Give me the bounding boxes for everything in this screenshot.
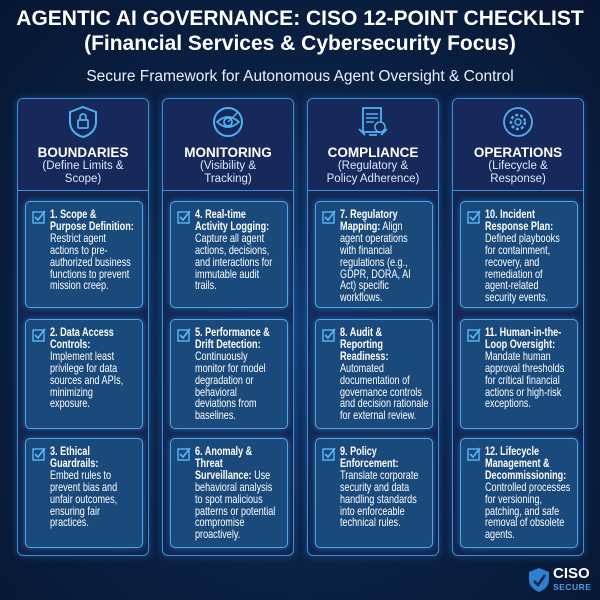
card 12: removal of obsolete xyxy=(485,515,564,529)
card 9: technical rules. xyxy=(340,515,401,529)
card 5: deviations from xyxy=(195,396,257,410)
card 8: Readiness: xyxy=(340,349,388,363)
card 12: agents. xyxy=(485,527,515,541)
header: operations xyxy=(453,99,583,191)
header: monitoring: MONITORING xyxy=(184,145,272,160)
card 4: Capture all agent xyxy=(195,231,264,245)
header: operations: Response) xyxy=(490,173,546,185)
card 1: 1. Scope & xyxy=(50,207,96,221)
card 5: Drift Detection: xyxy=(195,337,261,351)
card 9: Translate corporate xyxy=(340,468,418,482)
header: monitoring xyxy=(163,99,293,191)
card 6 xyxy=(170,438,288,548)
card 3: Embed rules to xyxy=(50,468,111,482)
header: boundaries: BOUNDARIES xyxy=(38,145,128,160)
title xyxy=(16,7,584,55)
card 12 xyxy=(460,438,578,548)
card 12: 12. Lifecycle xyxy=(485,444,539,458)
card 6: behavioral analysis xyxy=(195,480,272,494)
panel: monitoring xyxy=(162,98,294,556)
header: monitoring: Tracking) xyxy=(204,173,252,185)
card 10: Defined playbooks xyxy=(485,231,560,245)
card 4: trails. xyxy=(195,278,217,292)
card 2: sources and APIs, xyxy=(50,373,123,387)
card 9: handling standards xyxy=(340,492,417,506)
card 10: remediation of xyxy=(485,267,543,281)
card 4 xyxy=(170,201,288,308)
card 4: Activity Logging: xyxy=(195,219,269,233)
card 9: 9. Policy xyxy=(340,444,377,458)
card 9: security and data xyxy=(340,480,409,494)
card 6: to spot malicious xyxy=(195,492,263,506)
card 4: actions, decisions, xyxy=(195,243,269,257)
card 4: immutable audit xyxy=(195,267,259,281)
card 10: for containment, xyxy=(485,243,550,257)
card 12: Controlled processes xyxy=(485,480,570,494)
card 8: governance controls xyxy=(340,385,422,399)
card 8 xyxy=(315,319,433,429)
card 7: Act) specific xyxy=(340,278,389,292)
header: compliance: (Regulatory & xyxy=(338,160,408,172)
panel: boundaries xyxy=(17,98,149,556)
header: operations: (Lifecycle & xyxy=(488,160,548,172)
card 7: Mapping: Align xyxy=(340,219,403,233)
card 8: and decision rationale xyxy=(340,396,428,410)
card 10 xyxy=(460,201,578,308)
card 11: Mandate human xyxy=(485,349,551,363)
card 6: 6. Anomaly & xyxy=(195,444,252,458)
card 2: 2. Data Access xyxy=(50,325,114,339)
card 6: patterns or potential xyxy=(195,504,275,518)
card 3 xyxy=(25,438,143,548)
subtitle: Secure Framework for Autonomous Agent Oversight & Control xyxy=(86,68,514,85)
card 11: exceptions. xyxy=(485,396,531,410)
card 3: 3. Ethical xyxy=(50,444,90,458)
header: operations: OPERATIONS xyxy=(474,145,562,160)
card 11 xyxy=(460,319,578,429)
card 6: Surveillance: Use xyxy=(195,468,270,482)
card 2: Controls: xyxy=(50,337,90,351)
card 1: authorized business xyxy=(50,255,131,269)
card 2 xyxy=(25,319,143,429)
card 3: Guardrails: xyxy=(50,456,98,470)
card 1: mission creep. xyxy=(50,278,109,292)
card 12: Management & xyxy=(485,456,550,470)
card 8: Reporting xyxy=(340,337,383,351)
card 7: 7. Regulatory xyxy=(340,207,398,221)
card 7 xyxy=(315,201,433,308)
header: boundaries: (Define Limits & xyxy=(42,160,124,172)
card 4: 4. Real-time xyxy=(195,207,246,221)
card 7: regulations (e.g., xyxy=(340,255,408,269)
header: boundaries: Scope) xyxy=(65,173,101,185)
card 9 xyxy=(315,438,433,548)
card 10: agent-related xyxy=(485,278,539,292)
card 1: functions to prevent xyxy=(50,267,129,281)
card 7: agent operations xyxy=(340,231,408,245)
card 2: exposure. xyxy=(50,396,90,410)
header: compliance xyxy=(308,99,438,191)
header: compliance: COMPLIANCE xyxy=(328,145,418,160)
card 2: Implement least xyxy=(50,349,114,363)
card 11: 11. Human-in-the- xyxy=(485,325,561,339)
card 5: monitor for model xyxy=(195,361,266,375)
card 12: Decommissioning: xyxy=(485,468,566,482)
card 12: patching, and safe xyxy=(485,504,559,518)
card 10: 10. Incident xyxy=(485,207,535,221)
card 5: behavioral xyxy=(195,385,237,399)
card 1: Restrict agent xyxy=(50,231,106,245)
card 8: documentation of xyxy=(340,373,410,387)
card 5: Continuously xyxy=(195,349,248,363)
card 7: GDPR, DORA, AI xyxy=(340,267,411,281)
card 10: Response Plan: xyxy=(485,219,553,233)
card 7: workflows. xyxy=(340,290,382,304)
card 4: and interactions for xyxy=(195,255,272,269)
card 2: minimizing xyxy=(50,385,93,399)
card 5 xyxy=(170,319,288,429)
header: monitoring: (Visibility & xyxy=(200,160,256,172)
card 5: baselines. xyxy=(195,408,236,422)
card 3: practices. xyxy=(50,515,89,529)
card 3: ensuring fair xyxy=(50,504,100,518)
panel: operations xyxy=(452,98,584,556)
card 5: 5. Performance & xyxy=(195,325,270,339)
card 11: Loop Oversight: xyxy=(485,337,555,351)
logo xyxy=(529,565,591,592)
card 3: unfair outcomes, xyxy=(50,492,117,506)
header: compliance: Policy Adherence) xyxy=(327,173,419,185)
card 2: privilege for data xyxy=(50,361,117,375)
card 11: approval thresholds xyxy=(485,361,564,375)
card 11: actions or high-risk xyxy=(485,385,561,399)
card 6: proactively. xyxy=(195,527,240,541)
card 9: Enforcement: xyxy=(340,456,399,470)
card 1: actions to pre- xyxy=(50,243,108,257)
card 10: security events. xyxy=(485,290,548,304)
card 11: for critical financial xyxy=(485,373,560,387)
card 1 xyxy=(25,201,143,308)
card 6: Threat xyxy=(195,456,223,470)
card 8: 8. Audit & xyxy=(340,325,382,339)
card 3: prevent bias and xyxy=(50,480,117,494)
card 12: for versioning, xyxy=(485,492,542,506)
header: boundaries xyxy=(18,99,148,191)
card 6: compromise xyxy=(195,515,244,529)
card 9: into enforceable xyxy=(340,504,405,518)
card 10: recovery, and xyxy=(485,255,539,269)
card 7: with financial xyxy=(340,243,392,257)
card 1: Purpose Definition: xyxy=(50,219,134,233)
logo: SECURE xyxy=(553,582,591,592)
card 8: Automated xyxy=(340,361,384,375)
card 8: for external review. xyxy=(340,408,416,422)
title: (Financial Services & Cybersecurity Focus) xyxy=(84,32,516,55)
card 5: degradation or xyxy=(195,373,254,387)
panel: compliance xyxy=(307,98,439,556)
logo: CISO xyxy=(553,565,590,582)
title: AGENTIC AI GOVERNANCE: CISO 12-POINT CHECKLIST xyxy=(16,7,584,30)
